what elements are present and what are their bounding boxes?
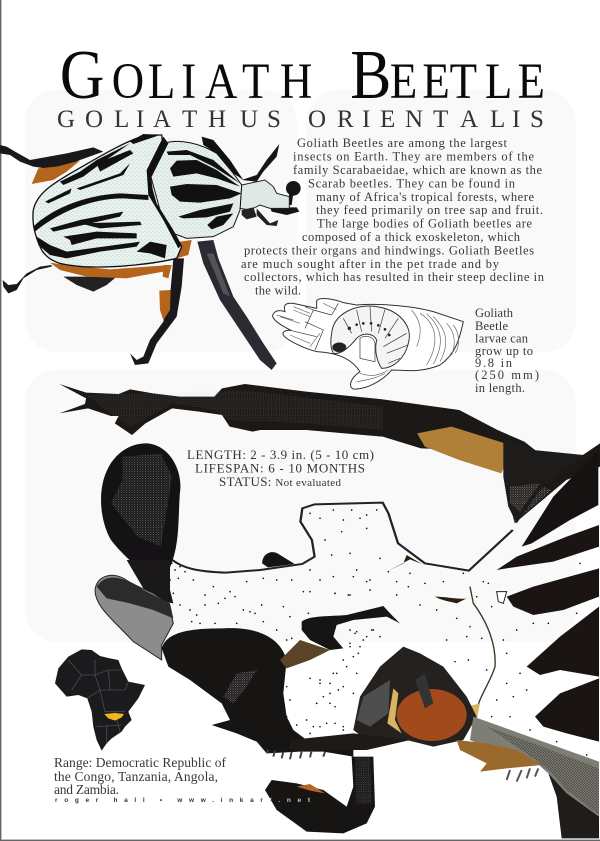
- orange eye: [397, 689, 467, 741]
- lower right leg: [470, 717, 599, 817]
- mouth: [302, 606, 400, 650]
- illustration: goliath beetle: [0, 134, 301, 370]
- larva caption: [475, 306, 539, 395]
- lower right dark: [548, 773, 599, 838]
- stats: LENGTH: 2 - 3.9 in. (5 - 10 cm): [187, 447, 374, 462]
- body text: Scarab beetles. They can be found in: [308, 176, 516, 190]
- eye antenna: [415, 673, 433, 708]
- larva caption: grow up to: [475, 344, 533, 358]
- lower right orange: [457, 740, 542, 772]
- body text: protects their organs and hindwings. Goliath Beetles: [244, 244, 534, 258]
- stats: LIFESPAN: 6 - 10 MONTHS: [195, 460, 365, 476]
- beetle stripes: [33, 134, 243, 258]
- subtitle: GOLIATHUS: [57, 106, 281, 133]
- beetle stipple: [33, 135, 240, 267]
- jaw highlight: [223, 670, 257, 703]
- range text: and Zambia.: [54, 782, 119, 797]
- beetle pronotum: [150, 141, 242, 238]
- body text: composed of a thick exoskeleton, which: [302, 230, 521, 244]
- close-up leg stipple: [86, 390, 383, 430]
- body text: insects on Earth. They are members of the: [293, 150, 534, 164]
- close-up club spots: [111, 453, 172, 547]
- lower antenna stipple: [355, 757, 372, 803]
- close-up leg orange: [417, 427, 509, 473]
- title: G: [60, 36, 104, 114]
- range text: the Congo, Tanzania, Angola,: [54, 769, 218, 784]
- beetle elytra: [33, 135, 182, 267]
- stem: [127, 560, 173, 603]
- credit: roger hall • www.inkar t.net: [55, 797, 311, 804]
- watermark background: [25, 90, 576, 642]
- body text: many of Africa's tropical forests, where: [316, 190, 534, 204]
- stats: STATUS: Not evaluated: [219, 474, 342, 489]
- subtitle: ORIENTALIS: [308, 106, 544, 133]
- range text: Range: Democratic Republic of: [54, 755, 226, 770]
- seam patch: [467, 703, 480, 723]
- larva caption: larvae can: [475, 332, 529, 346]
- map highlight: [104, 713, 124, 721]
- gland grey: [357, 680, 390, 727]
- title: OLIATH: [112, 53, 312, 110]
- body text: collectors, which has resulted in their steep decline in: [244, 270, 545, 284]
- stipple cluster: [170, 563, 373, 733]
- larva caption: Goliath: [475, 306, 514, 320]
- lower antenna: [265, 757, 375, 833]
- horn: [95, 575, 173, 660]
- neck highlight: [510, 483, 540, 512]
- fringe: [267, 750, 325, 759]
- range text: [54, 755, 226, 797]
- beetle head: [240, 180, 289, 210]
- close-up leg: [59, 384, 600, 523]
- body text: The large bodies of Goliath beetles are: [317, 216, 532, 230]
- close-up head outline: [170, 503, 513, 573]
- yellow patch: [387, 688, 402, 733]
- lower right leg stipple: [487, 727, 599, 815]
- body text: they feed primarily on tree sap and fruit.: [316, 203, 543, 217]
- oval marking: [497, 592, 507, 603]
- map: Africa range: [55, 649, 145, 751]
- illustration: close-up right: [280, 440, 599, 838]
- dark gland: [353, 647, 477, 747]
- close-up tooth: [262, 552, 295, 567]
- larva caption: 9.8 in: [475, 356, 513, 370]
- larva caption: in length.: [475, 381, 525, 395]
- larva caption: (250 mm): [475, 368, 539, 382]
- stipple dots: [310, 510, 587, 755]
- neck: [503, 440, 583, 523]
- beetle antenna: [242, 144, 301, 215]
- seam top: [387, 555, 422, 572]
- jaw: [162, 628, 353, 757]
- title: EETLE: [390, 53, 545, 110]
- dark bottom band: [290, 733, 410, 750]
- close-up club: [101, 443, 180, 597]
- black stripes: [497, 525, 599, 742]
- seam dash: [435, 597, 467, 603]
- body text: the wild.: [255, 284, 301, 298]
- larva caption: Beetle: [475, 319, 508, 333]
- body text: Goliath Beetles are among the largest: [297, 136, 508, 150]
- beetle legs: [0, 145, 277, 370]
- horn dark: [97, 577, 173, 618]
- mouth brown: [280, 640, 330, 668]
- illustration: larva in hand: [273, 299, 463, 389]
- illustration: close-up upper parts: [59, 384, 600, 597]
- title: B: [350, 36, 391, 114]
- seam: [470, 587, 495, 720]
- illustration: close-up lower left: [95, 560, 375, 833]
- body text: are much sought after in the pet trade and by: [241, 257, 500, 271]
- body text: family Scarabaeidae, which are known as the: [293, 163, 542, 177]
- wedge stripe: [522, 450, 598, 547]
- body text: [241, 136, 545, 298]
- beetle eye: [242, 207, 278, 226]
- stats: [187, 447, 374, 489]
- hairs: [507, 768, 538, 782]
- close-up neck highlight: [509, 483, 551, 523]
- lower antenna orange: [297, 784, 325, 793]
